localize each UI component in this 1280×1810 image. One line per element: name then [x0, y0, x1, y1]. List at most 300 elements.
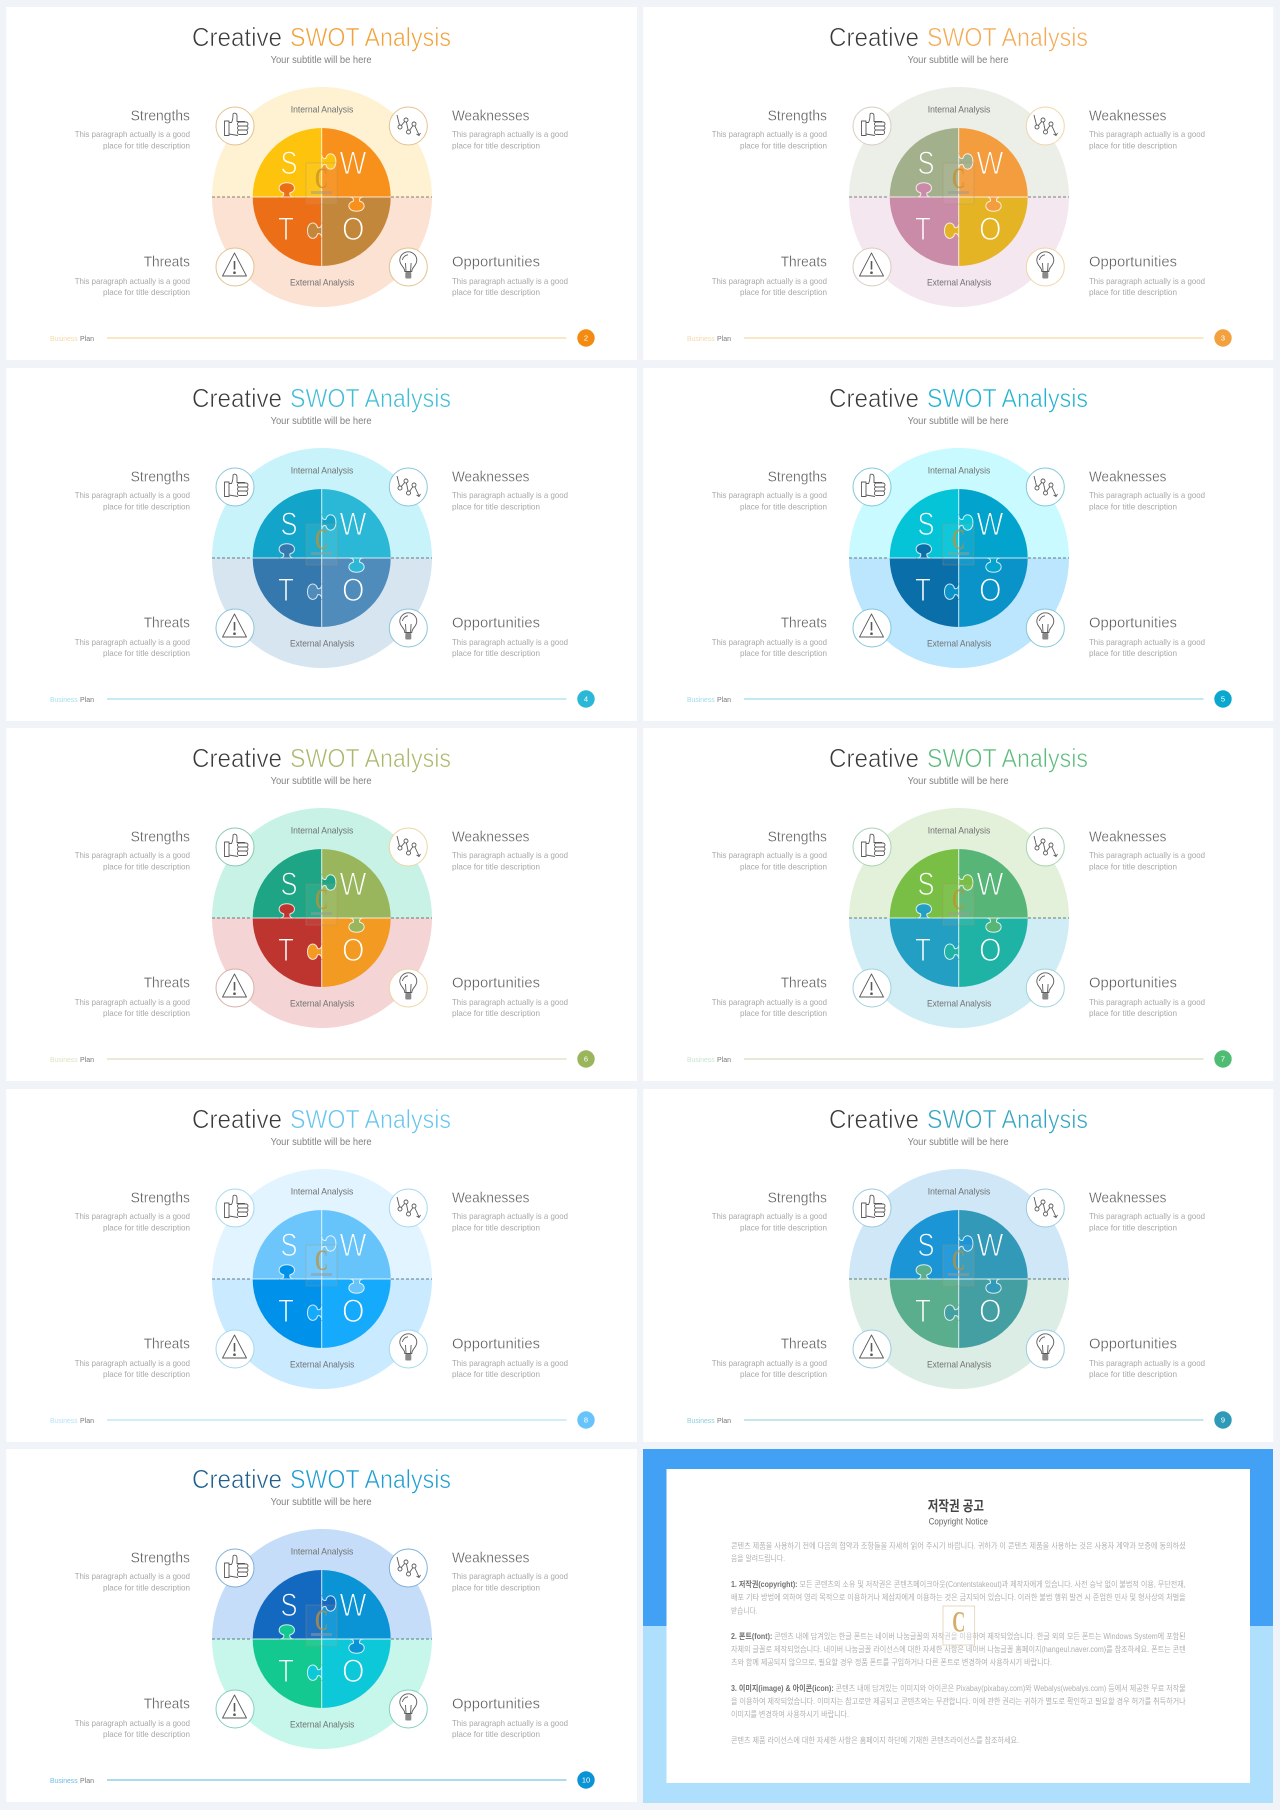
- SWOT diagram: W: [340, 1587, 367, 1623]
- title: Creative: [192, 1464, 282, 1494]
- footer: Plan: [80, 1776, 94, 1785]
- SWOT diagram: T: [915, 932, 931, 968]
- panel: blue frame: [643, 1449, 1273, 1803]
- SWOT diagram: Internal Analysis: [927, 465, 990, 476]
- footer: 4: [584, 694, 588, 703]
- SWOT diagram: [212, 1169, 432, 1388]
- text block: introduction: [731, 1540, 1186, 1563]
- opportunities block: Opportunities: [1089, 975, 1177, 992]
- SWOT diagram: O: [979, 572, 1001, 608]
- SWOT diagram: External Analysis: [290, 277, 355, 288]
- SWOT diagram: O: [979, 1292, 1001, 1328]
- SWOT diagram: O: [979, 932, 1001, 968]
- title: [192, 22, 451, 52]
- SWOT diagram: W: [340, 866, 367, 902]
- text block: font clause: 2. 폰트(font): 콘텐츠 내에 담겨있는 한글 폰트는 네이버 나눔글꼴의 저작권을 이용하여 제작되었습니다. 한글 외의 모든 폰트는 Windows System에 포함된: [731, 1631, 1186, 1641]
- footer: 7: [1221, 1055, 1225, 1064]
- text block: font clause: 자체의 글꼴로 제작되었습니다. 네이버 나눔글꼴 라이선스에 대한 자세한 사항은 네이버 나눔글꼴 홈페이지(hangeul.naver.com)를 참조하세요. 폰트는 콘텐: [731, 1644, 1186, 1654]
- strengths block: Strengths: [131, 107, 190, 124]
- threats block: Threats: [144, 254, 190, 271]
- opportunities block: Opportunities: [452, 975, 540, 992]
- panel: white notice card: [666, 1469, 1250, 1783]
- strengths block: [75, 107, 254, 150]
- SWOT diagram: T: [278, 1653, 294, 1689]
- weaknesses block: This paragraph actually is a good: [1089, 129, 1205, 139]
- footer: Business: [50, 1776, 78, 1785]
- opportunities block: place for title description: [452, 287, 540, 297]
- SWOT diagram: Internal Analysis: [291, 826, 354, 837]
- SWOT diagram: [212, 87, 432, 307]
- watermark: [306, 1244, 337, 1286]
- strengths block: place for title description: [103, 140, 190, 150]
- SWOT diagram: [212, 1529, 432, 1749]
- strengths block: Strengths: [131, 1549, 190, 1566]
- threats block: [711, 969, 891, 1018]
- SWOT diagram: Internal Analysis: [927, 105, 990, 116]
- weaknesses block: This paragraph actually is a good: [452, 129, 568, 139]
- text block: closing note: 콘텐츠 제품 라이선스에 대한 자세한 사항은 홈페이지 하단에 기재한 콘텐츠라이선스를 참조하세요.: [731, 1735, 1019, 1745]
- SWOT diagram: T: [278, 932, 294, 968]
- threats block: place for title description: [740, 287, 827, 297]
- strengths block: Strengths: [767, 107, 827, 124]
- title: SWOT Analysis: [290, 743, 451, 773]
- SWOT diagram: W: [340, 1226, 367, 1262]
- threats block: Threats: [780, 614, 827, 631]
- strengths block: This paragraph actually is a good: [75, 490, 190, 500]
- threats block: This paragraph actually is a good: [711, 276, 827, 286]
- SWOT diagram: S: [917, 866, 934, 902]
- weaknesses block: place for title description: [1089, 501, 1177, 511]
- footer: Business: [50, 1055, 78, 1064]
- weaknesses block: place for title description: [1089, 862, 1177, 872]
- footer: Plan: [80, 334, 94, 343]
- subtitle: Your subtitle will be here: [907, 55, 1009, 66]
- threats block: This paragraph actually is a good: [711, 1358, 827, 1368]
- SWOT diagram: [212, 808, 432, 1028]
- opportunities block: [1026, 1330, 1205, 1378]
- watermark: C: [952, 883, 965, 916]
- weaknesses block: place for title description: [452, 862, 540, 872]
- weaknesses block: place for title description: [452, 140, 540, 150]
- footer: [687, 329, 1231, 347]
- strengths block: place for title description: [103, 501, 190, 511]
- subtitle: Your subtitle will be here: [271, 415, 372, 426]
- opportunities block: place for title description: [1089, 1008, 1177, 1018]
- opportunities block: Opportunities: [1089, 254, 1177, 271]
- opportunities block: Opportunities: [452, 1335, 540, 1352]
- weaknesses block: [389, 1549, 568, 1592]
- watermark: C: [315, 162, 328, 195]
- SWOT diagram: S: [917, 145, 934, 181]
- slide 10: copyright notice: [643, 1449, 1273, 1803]
- strengths block: Strengths: [131, 1189, 190, 1206]
- footer: Plan: [717, 334, 731, 343]
- weaknesses block: [1026, 828, 1205, 872]
- SWOT diagram: T: [915, 211, 931, 247]
- opportunities block: Opportunities: [452, 1696, 540, 1713]
- text block: font clause: 츠와 함께 제공되지 않으므로, 필요할 경우 정품 폰트를 구입하거나 다른 폰트로 변경하여 사용하시기 바랍니다.: [731, 1657, 1052, 1667]
- subtitle: Your subtitle will be here: [271, 776, 372, 787]
- strengths block: [711, 468, 891, 511]
- footer: Business: [50, 694, 78, 704]
- weaknesses block: Weaknesses: [452, 468, 529, 485]
- subtitle: Your subtitle will be here: [907, 776, 1009, 787]
- weaknesses block: Weaknesses: [452, 1189, 529, 1206]
- footer: [687, 1050, 1231, 1068]
- strengths block: This paragraph actually is a good: [75, 129, 190, 139]
- SWOT diagram: S: [280, 1226, 298, 1262]
- weaknesses block: [389, 107, 568, 150]
- text block: copyright clause: 배포 기타 방법에 의하여 영리 목적으로 이용하거나 제삼자에게 이용하는 것은 금지되어 있습니다. 이러한 불법 행위 발견 시 준엄한 민사 및 형사상의 처벌을: [731, 1592, 1186, 1602]
- watermark: C: [952, 522, 965, 556]
- strengths block: This paragraph actually is a good: [75, 1210, 190, 1220]
- threats block: [75, 1690, 254, 1739]
- title: SWOT Analysis: [927, 22, 1088, 52]
- weaknesses block: place for title description: [452, 501, 540, 511]
- text block: copyright clause: 1. 저작권(copyright): 모든 콘텐츠의 소유 및 저작권은 콘텐츠메이크아웃(Contentstakeout)과 제작자에게 있습니다. 사전 승낙 없이 불법적 이용, 무단전재,: [731, 1579, 1186, 1589]
- weaknesses block: [1026, 107, 1205, 150]
- strengths block: [75, 1549, 254, 1592]
- weaknesses block: Weaknesses: [452, 828, 529, 845]
- threats block: This paragraph actually is a good: [75, 997, 190, 1007]
- title: Creative: [192, 383, 282, 413]
- footer: [50, 329, 595, 347]
- threats block: place for title description: [103, 287, 190, 297]
- threats block: place for title description: [740, 1368, 827, 1378]
- threats block: place for title description: [103, 1008, 190, 1018]
- slide 1: orange SWOT: [6, 7, 637, 360]
- watermark: [943, 1606, 975, 1645]
- strengths block: This paragraph actually is a good: [75, 1571, 190, 1581]
- title: SWOT Analysis: [290, 1464, 451, 1494]
- SWOT diagram: T: [915, 572, 931, 608]
- slide 7: sky blue SWOT: [6, 1089, 637, 1442]
- slide 5: green red orange SWOT: [6, 728, 637, 1081]
- weaknesses block: place for title description: [1089, 140, 1177, 150]
- text block: introduction: 콘텐츠 제품을 사용하기 전에 다음의 협약과 조항들을 자세히 읽어 주시기 바랍니다. 귀하가 이 콘텐츠 제품을 사용하는 것은 사용자 계약과 보증에 동의하셨: [731, 1540, 1186, 1550]
- SWOT diagram: W: [976, 866, 1004, 902]
- watermark: [943, 522, 974, 564]
- footer: Plan: [717, 694, 731, 704]
- weaknesses block: [1026, 468, 1205, 511]
- weaknesses block: [389, 1188, 568, 1232]
- threats block: Threats: [144, 1696, 190, 1713]
- threats block: Threats: [780, 254, 827, 271]
- opportunities block: [389, 969, 568, 1018]
- title: SWOT Analysis: [290, 1104, 451, 1134]
- weaknesses block: [1026, 1188, 1205, 1232]
- SWOT diagram: W: [340, 145, 367, 181]
- SWOT diagram: S: [280, 505, 298, 541]
- SWOT diagram: O: [979, 211, 1001, 247]
- footer: Business: [687, 1416, 715, 1424]
- strengths block: Strengths: [131, 828, 190, 845]
- SWOT diagram: Internal Analysis: [927, 826, 990, 837]
- SWOT diagram: External Analysis: [927, 638, 991, 649]
- title: [829, 1104, 1088, 1134]
- strengths block: [75, 1188, 254, 1232]
- strengths block: place for title description: [103, 862, 190, 872]
- SWOT diagram: [849, 448, 1069, 667]
- threats block: Threats: [780, 1335, 827, 1352]
- opportunities block: Opportunities: [452, 614, 540, 631]
- footer: Plan: [80, 1055, 94, 1064]
- slide 2: muted multi-colour SWOT: [644, 7, 1274, 360]
- watermark: [306, 162, 337, 204]
- threats block: This paragraph actually is a good: [711, 997, 827, 1007]
- SWOT diagram: [212, 448, 432, 667]
- opportunities block: This paragraph actually is a good: [1089, 997, 1205, 1007]
- weaknesses block: Weaknesses: [1089, 828, 1166, 845]
- strengths block: place for title description: [103, 1582, 190, 1592]
- footer: Business: [50, 1416, 78, 1424]
- weaknesses block: Weaknesses: [1089, 107, 1166, 124]
- slide 4: bright cyan SWOT: [644, 368, 1274, 721]
- watermark: C: [315, 883, 328, 916]
- strengths block: [75, 468, 254, 511]
- strengths block: This paragraph actually is a good: [75, 850, 190, 860]
- opportunities block: [389, 1330, 568, 1378]
- footer: Business: [687, 334, 715, 343]
- weaknesses block: [389, 468, 568, 511]
- SWOT diagram: S: [280, 145, 298, 181]
- SWOT diagram: External Analysis: [290, 1359, 355, 1370]
- text block: copyright clause: 받습니다.: [731, 1606, 758, 1616]
- weaknesses block: Weaknesses: [452, 1549, 529, 1566]
- title: Creative: [829, 743, 919, 773]
- watermark: [943, 883, 974, 925]
- slide 9: royal blue and mint SWOT: [6, 1449, 637, 1802]
- footer: [687, 690, 1231, 707]
- opportunities block: place for title description: [452, 1368, 540, 1378]
- watermark: [943, 162, 974, 204]
- text block: font clause: [731, 1631, 1186, 1667]
- opportunities block: place for title description: [1089, 287, 1177, 297]
- opportunities block: This paragraph actually is a good: [1089, 1358, 1205, 1368]
- title: SWOT Analysis: [927, 383, 1088, 413]
- SWOT diagram: [849, 87, 1069, 307]
- opportunities block: place for title description: [1089, 648, 1177, 658]
- footer: [50, 1411, 595, 1428]
- footer: 2: [584, 334, 588, 343]
- title: [829, 383, 1088, 413]
- SWOT diagram: Internal Analysis: [291, 1186, 354, 1197]
- threats block: place for title description: [740, 1008, 827, 1018]
- SWOT diagram: W: [976, 145, 1004, 181]
- weaknesses block: This paragraph actually is a good: [452, 1210, 568, 1220]
- opportunities block: [389, 1690, 568, 1739]
- watermark: [306, 1604, 337, 1646]
- weaknesses block: Weaknesses: [1089, 468, 1166, 485]
- weaknesses block: This paragraph actually is a good: [1089, 490, 1205, 500]
- title: [192, 1464, 451, 1494]
- threats block: [75, 1330, 254, 1378]
- text block: image clause: 3. 이미지(image) & 아이콘(icon): 콘텐츠 내에 담겨있는 이미지와 아이콘은 Pixabay(pixabay.com)와 Webalys(webalys.com) 등에서 제공한 무료 저작물: [731, 1683, 1186, 1693]
- footer: [687, 1411, 1231, 1428]
- weaknesses block: place for title description: [452, 1582, 540, 1592]
- threats block: Threats: [144, 1335, 190, 1352]
- SWOT diagram: External Analysis: [290, 998, 355, 1009]
- footer: Plan: [717, 1055, 731, 1064]
- strengths block: [75, 828, 254, 872]
- strengths block: place for title description: [740, 501, 827, 511]
- SWOT diagram: O: [342, 572, 364, 608]
- opportunities block: Opportunities: [1089, 614, 1177, 631]
- watermark: [306, 522, 337, 564]
- watermark: [943, 1244, 974, 1286]
- SWOT diagram: T: [278, 1292, 294, 1328]
- slide 8: blue and sage SWOT: [644, 1089, 1274, 1442]
- title: [829, 743, 1088, 773]
- text block: image clause: [731, 1683, 1186, 1719]
- opportunities block: [389, 248, 568, 297]
- opportunities block: Opportunities: [1089, 1335, 1177, 1352]
- SWOT diagram: T: [915, 1292, 931, 1328]
- title: Creative: [829, 1104, 919, 1134]
- strengths block: place for title description: [740, 140, 827, 150]
- opportunities block: [1026, 248, 1205, 297]
- SWOT diagram: O: [342, 211, 364, 247]
- SWOT diagram: O: [342, 1653, 364, 1689]
- strengths block: This paragraph actually is a good: [711, 1210, 827, 1220]
- threats block: Threats: [144, 975, 190, 992]
- threats block: Threats: [144, 614, 190, 631]
- opportunities block: place for title description: [452, 1008, 540, 1018]
- title: Creative: [192, 22, 282, 52]
- slide 6: green and teal SWOT: [644, 728, 1274, 1081]
- strengths block: This paragraph actually is a good: [711, 129, 827, 139]
- threats block: [711, 248, 891, 297]
- opportunities block: This paragraph actually is a good: [452, 276, 568, 286]
- subtitle: Your subtitle will be here: [271, 55, 372, 66]
- slide 3: teal and steel blue SWOT: [6, 368, 637, 721]
- watermark: C: [315, 1244, 328, 1276]
- title: [192, 743, 451, 773]
- strengths block: Strengths: [767, 468, 827, 485]
- watermark: [306, 883, 337, 925]
- footer: 9: [1221, 1415, 1225, 1424]
- footer: 10: [582, 1776, 590, 1785]
- footer: 8: [584, 1415, 588, 1424]
- title: [192, 1104, 451, 1134]
- weaknesses block: place for title description: [452, 1222, 540, 1232]
- SWOT diagram: External Analysis: [927, 277, 991, 288]
- subtitle: Your subtitle will be here: [907, 1136, 1009, 1147]
- weaknesses block: This paragraph actually is a good: [1089, 850, 1205, 860]
- strengths block: [711, 828, 891, 872]
- title: SWOT Analysis: [927, 743, 1088, 773]
- opportunities block: place for title description: [1089, 1368, 1177, 1378]
- title: Creative: [829, 22, 919, 52]
- strengths block: Strengths: [767, 1189, 827, 1206]
- weaknesses block: This paragraph actually is a good: [452, 850, 568, 860]
- heading: Copyright Notice: Copyright Notice: [929, 1516, 988, 1527]
- footer: [50, 690, 595, 707]
- weaknesses block: This paragraph actually is a good: [1089, 1210, 1205, 1220]
- SWOT diagram: Internal Analysis: [291, 1547, 354, 1558]
- text block: copyright clause: [731, 1579, 1186, 1616]
- opportunities block: Opportunities: [452, 254, 540, 271]
- threats block: [75, 969, 254, 1018]
- title: [829, 22, 1088, 52]
- subtitle: Your subtitle will be here: [271, 1497, 372, 1508]
- footer: Business: [687, 694, 715, 704]
- title: SWOT Analysis: [290, 22, 451, 52]
- threats block: place for title description: [103, 1729, 190, 1739]
- footer: 6: [584, 1055, 588, 1064]
- opportunities block: [389, 608, 568, 658]
- weaknesses block: [389, 828, 568, 872]
- opportunities block: This paragraph actually is a good: [452, 1358, 568, 1368]
- footer: [50, 1771, 595, 1789]
- threats block: Threats: [780, 975, 827, 992]
- threats block: This paragraph actually is a good: [75, 1358, 190, 1368]
- strengths block: [711, 1188, 891, 1232]
- opportunities block: This paragraph actually is a good: [452, 997, 568, 1007]
- SWOT diagram: T: [278, 211, 294, 247]
- threats block: [711, 608, 891, 658]
- title: Creative: [192, 1104, 282, 1134]
- strengths block: place for title description: [740, 1222, 827, 1232]
- weaknesses block: Weaknesses: [452, 107, 529, 124]
- threats block: [75, 608, 254, 658]
- opportunities block: [1026, 969, 1205, 1018]
- weaknesses block: This paragraph actually is a good: [452, 490, 568, 500]
- watermark: C: [952, 162, 965, 195]
- strengths block: place for title description: [740, 862, 827, 872]
- SWOT diagram: External Analysis: [290, 638, 355, 649]
- footer: 3: [1221, 334, 1225, 343]
- text block: image clause: 을 이용하여 제작되었습니다. 이미지는 참고로만 제공되고 콘텐츠와는 무관합니다. 이에 관한 권리는 귀하가 별도로 확인하고 필요할 경우 허가를 취득하거나: [731, 1696, 1186, 1706]
- threats block: This paragraph actually is a good: [75, 276, 190, 286]
- weaknesses block: Weaknesses: [1089, 1189, 1166, 1206]
- opportunities block: This paragraph actually is a good: [1089, 636, 1205, 646]
- footer: Plan: [717, 1416, 731, 1424]
- strengths block: This paragraph actually is a good: [711, 490, 827, 500]
- SWOT diagram: W: [976, 1226, 1004, 1262]
- threats block: place for title description: [740, 648, 827, 658]
- opportunities block: [1026, 608, 1205, 658]
- threats block: This paragraph actually is a good: [75, 636, 190, 646]
- SWOT diagram: External Analysis: [290, 1719, 355, 1730]
- SWOT diagram: External Analysis: [927, 998, 991, 1009]
- threats block: This paragraph actually is a good: [75, 1718, 190, 1728]
- SWOT diagram: [849, 808, 1069, 1028]
- SWOT diagram: O: [342, 932, 364, 968]
- weaknesses block: place for title description: [1089, 1222, 1177, 1232]
- SWOT diagram: T: [278, 572, 294, 608]
- title: SWOT Analysis: [927, 1104, 1088, 1134]
- opportunities block: This paragraph actually is a good: [1089, 276, 1205, 286]
- subtitle: Your subtitle will be here: [271, 1136, 372, 1147]
- watermark: C: [952, 1606, 965, 1638]
- text block: introduction: 음을 알려드립니다.: [731, 1553, 785, 1563]
- watermark: C: [952, 1244, 965, 1276]
- footer: Plan: [80, 1416, 94, 1424]
- opportunities block: place for title description: [452, 648, 540, 658]
- subtitle: Your subtitle will be here: [907, 415, 1009, 426]
- SWOT diagram: Internal Analysis: [291, 465, 354, 476]
- SWOT diagram: Internal Analysis: [291, 105, 354, 116]
- strengths block: Strengths: [131, 468, 190, 485]
- text block: image clause: 이미지를 변경하여 사용하시기 바랍니다.: [731, 1709, 849, 1719]
- SWOT diagram: O: [342, 1292, 364, 1328]
- strengths block: This paragraph actually is a good: [711, 850, 827, 860]
- SWOT diagram: S: [280, 866, 298, 902]
- strengths block: Strengths: [767, 828, 827, 845]
- SWOT diagram: S: [917, 505, 934, 541]
- watermark: C: [315, 522, 328, 556]
